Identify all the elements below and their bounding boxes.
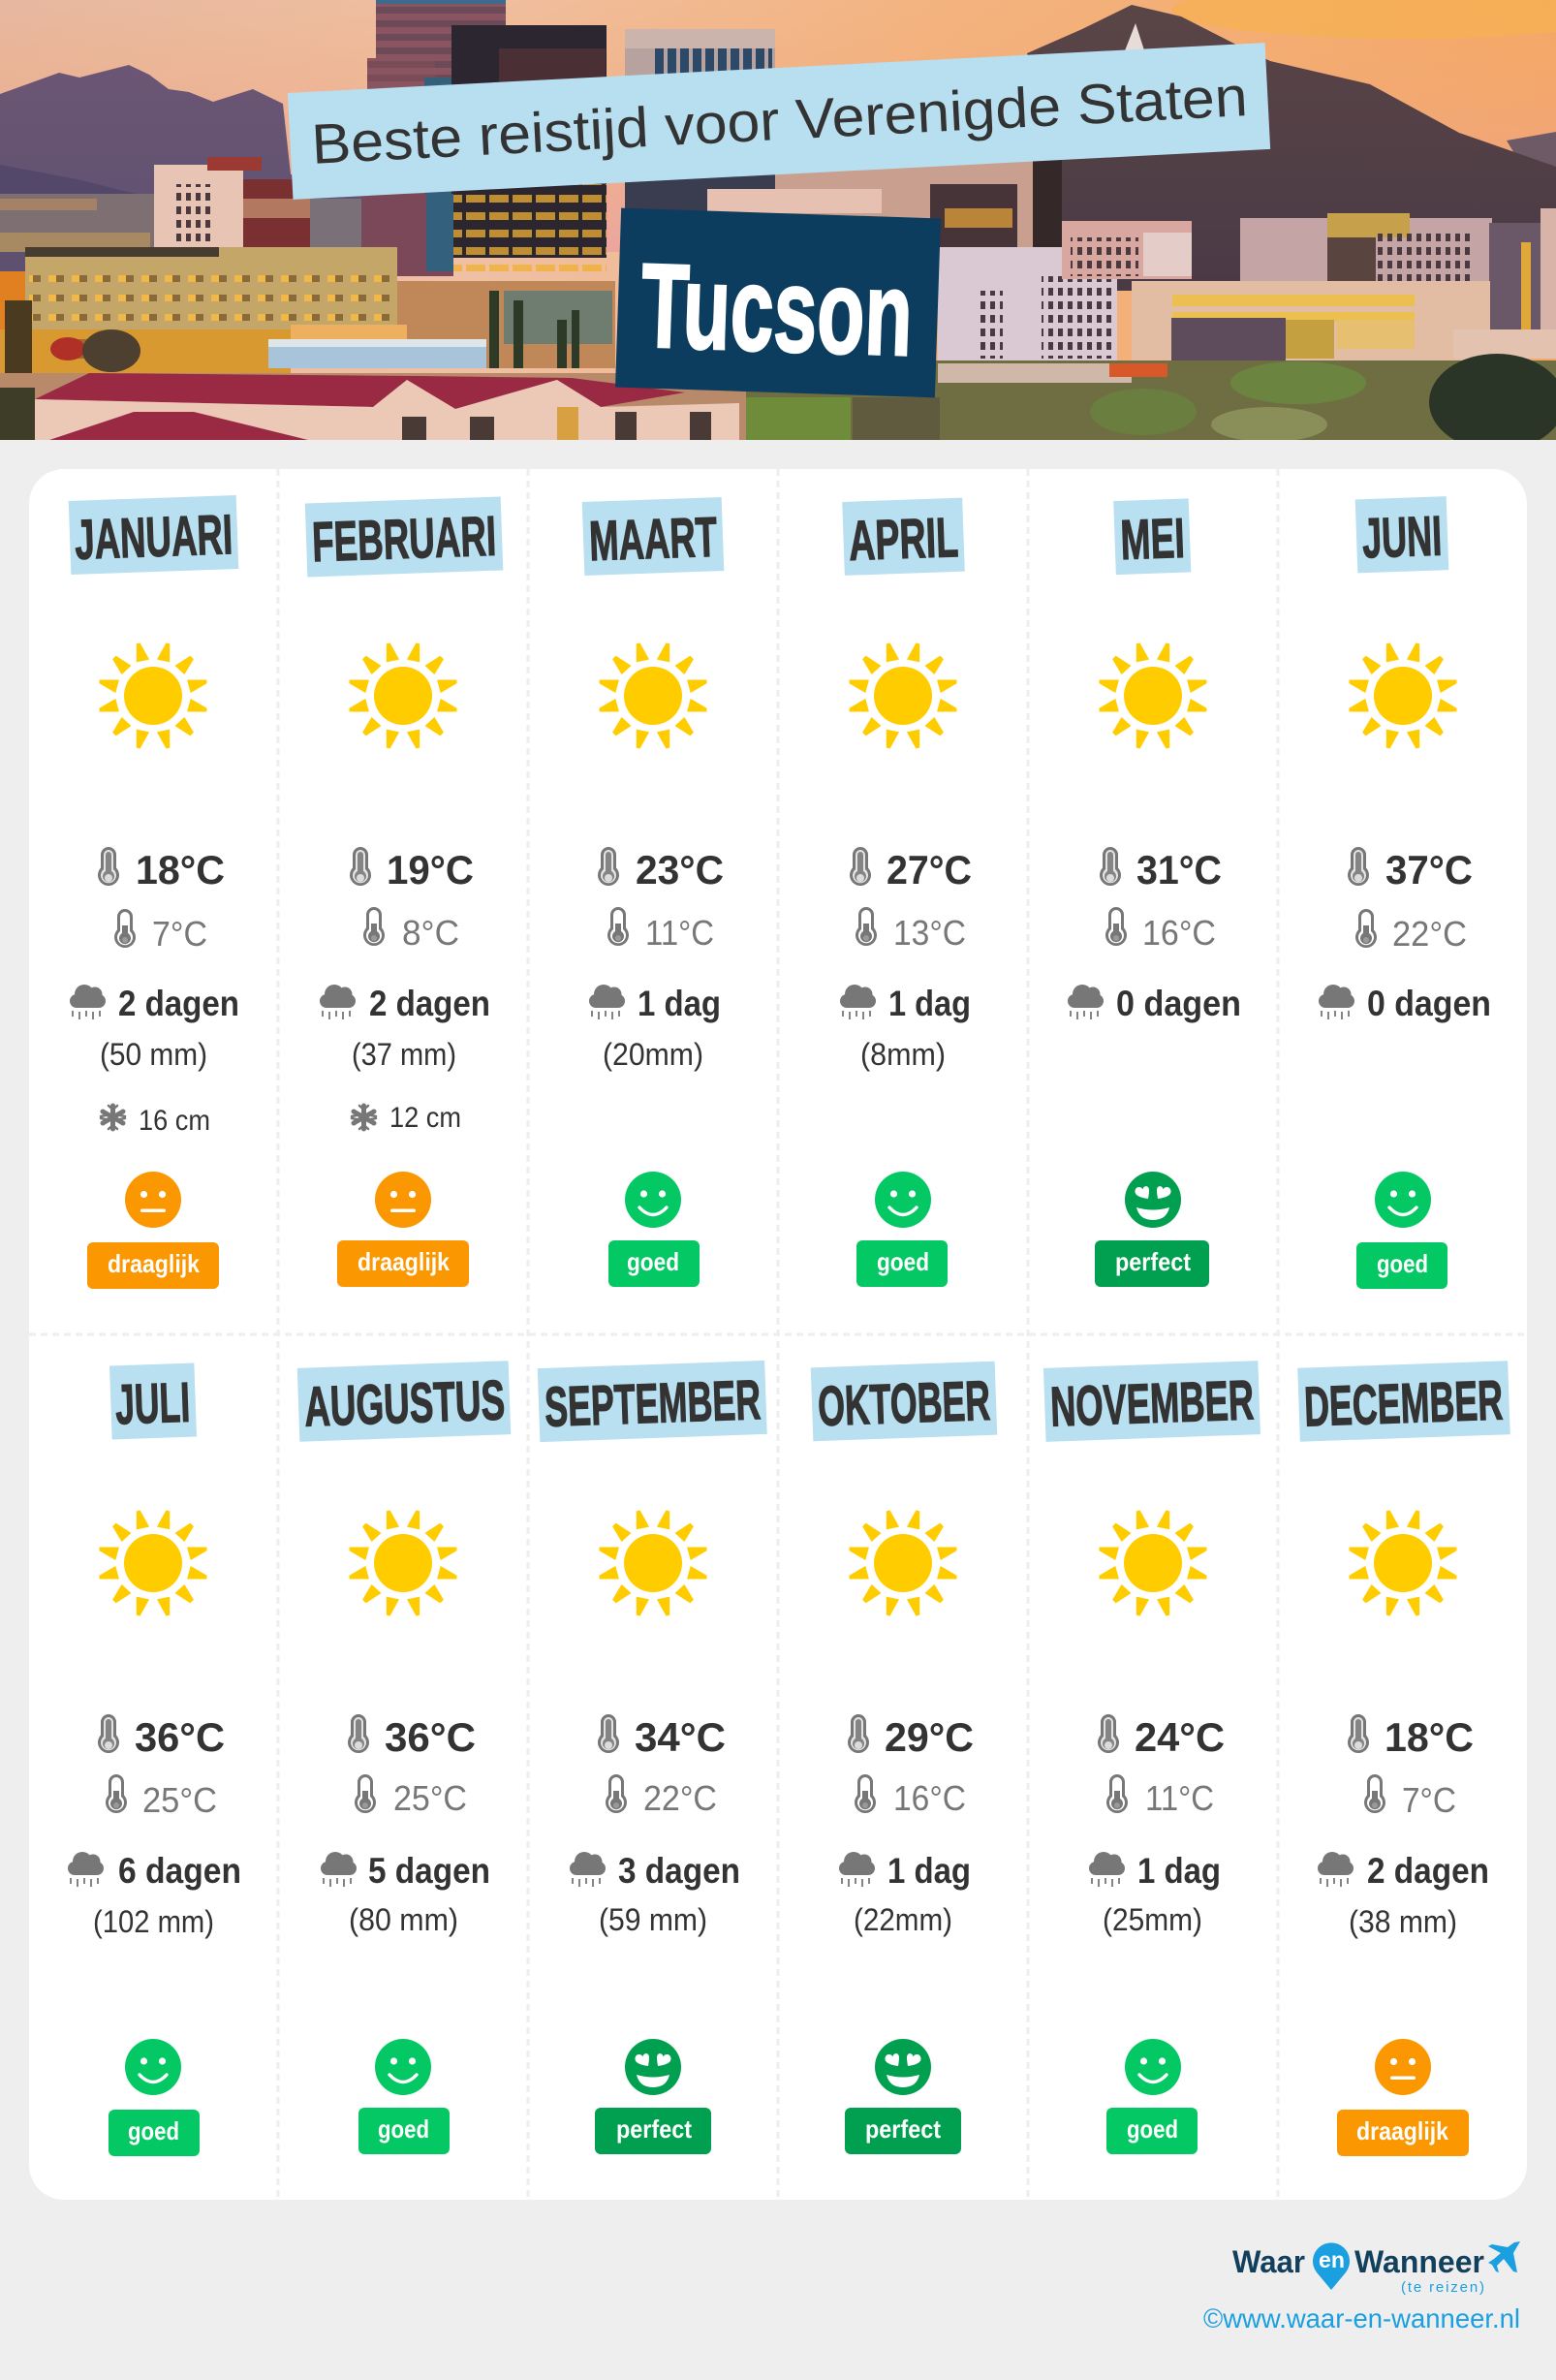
logo: Waar en Wanneer [1232, 2241, 1520, 2296]
month: april [840, 498, 972, 1287]
month heading [1355, 496, 1448, 573]
month heading [811, 1362, 997, 1441]
rating badge [595, 2108, 711, 2154]
icon: sun [100, 643, 206, 748]
icon: neutral face [375, 1172, 431, 1228]
month heading [69, 495, 238, 575]
icon: sun [1350, 643, 1456, 748]
month: februari [305, 496, 503, 1287]
max temperature: 27°C [887, 847, 972, 892]
min temperature: 16°C [893, 1778, 966, 1818]
icon: max temperature [1348, 1714, 1369, 1753]
icon: sun [850, 643, 956, 748]
rainfall: (59 mm) [599, 1902, 707, 1937]
icon: rain [839, 1852, 875, 1887]
rainfall: (8mm) [860, 1037, 946, 1072]
rating badge [337, 1240, 469, 1287]
max temperature: 34°C [635, 1714, 726, 1760]
rating badge: goed [877, 1247, 929, 1276]
icon: min temperature [106, 1774, 127, 1813]
icon: min temperature [114, 909, 136, 948]
rain days: 0 dagen [1116, 984, 1241, 1023]
min temperature: 11°C [1145, 1778, 1214, 1818]
icon: min temperature [1105, 907, 1127, 946]
month heading: FEBRUARI [311, 505, 497, 574]
icon: sun [100, 1511, 206, 1615]
month: juli [68, 1362, 241, 2156]
icon: rain [321, 1852, 357, 1887]
month: oktober [811, 1362, 997, 2154]
icon: max temperature [848, 1714, 869, 1753]
rating badge [608, 1240, 700, 1287]
month heading: JANUARI [74, 503, 233, 572]
icon: min temperature [855, 1774, 876, 1813]
rating badge [856, 1240, 948, 1287]
rain days: 1 dag [887, 1851, 971, 1891]
icon: max temperature [348, 1714, 369, 1753]
rating badge: goed [627, 1247, 679, 1276]
month heading: OKTOBER [817, 1369, 991, 1438]
icon: smiling face [1375, 1172, 1431, 1228]
month heading: AUGUSTUS [303, 1368, 506, 1439]
icon: min temperature [607, 907, 629, 946]
rainfall: (25mm) [1103, 1902, 1202, 1937]
rainfall: (102 mm) [93, 1904, 214, 1939]
icon: min temperature [856, 907, 877, 946]
min temperature: 25°C [393, 1778, 467, 1818]
icon: max temperature [98, 847, 119, 886]
icon: rain [1068, 985, 1104, 1019]
icon: sun [350, 1511, 456, 1615]
rain days: 1 dag [638, 984, 721, 1023]
month: mei [1068, 498, 1241, 1287]
logo word: Waar: Waar [1232, 2244, 1305, 2279]
rain days: 2 dagen [118, 984, 239, 1023]
rain days: 3 dagen [618, 1851, 740, 1891]
snowfall: 16 cm [139, 1105, 210, 1137]
rating badge: draaglijk [358, 1247, 450, 1276]
max temperature: 37°C [1385, 847, 1473, 892]
rating badge: goed [1377, 1249, 1428, 1278]
max temperature: 36°C [385, 1714, 476, 1760]
icon: smiling face [1125, 2039, 1181, 2095]
icon: sun [600, 1511, 706, 1615]
max temperature: 31°C [1136, 847, 1222, 892]
icon: rain [840, 985, 876, 1019]
month heading: JUNI [1361, 505, 1443, 570]
icon: max temperature [1348, 847, 1369, 886]
rain days: 2 dagen [1367, 1851, 1489, 1891]
panel: monthly climate table [29, 469, 1527, 2200]
month heading: MAART [588, 506, 718, 573]
rain days: 0 dagen [1367, 984, 1491, 1023]
logo tagline: (te reizen) [1401, 2279, 1484, 2296]
icon: sun [1100, 1511, 1206, 1615]
rain days: 6 dagen [118, 1851, 241, 1891]
icon: max temperature [98, 1714, 119, 1753]
icon: sun [1100, 643, 1206, 748]
rating badge: perfect [1115, 1247, 1191, 1276]
month heading: MEI [1119, 507, 1186, 572]
icon: max temperature [350, 847, 371, 886]
rating badge [1337, 2110, 1469, 2156]
icon: max temperature [1098, 1714, 1119, 1753]
rating badge: perfect [616, 2114, 692, 2144]
month: maart [582, 497, 724, 1287]
rating badge [1095, 1240, 1209, 1287]
icon: sun [600, 643, 706, 748]
rating badge: perfect [865, 2114, 941, 2144]
rating badge [1106, 2108, 1198, 2154]
max temperature: 29°C [885, 1714, 974, 1760]
city name banner: Tucson: Tucson [639, 239, 915, 382]
icon: airplane [1488, 2241, 1520, 2272]
icon: snow [352, 1106, 376, 1129]
icon: min temperature [1106, 1774, 1128, 1813]
icon: max temperature [850, 847, 871, 886]
icon: rain [1318, 1852, 1354, 1887]
icon: smiling face [625, 1172, 681, 1228]
rainfall: (20mm) [603, 1037, 703, 1072]
month heading [842, 498, 965, 576]
icon: max temperature [598, 847, 619, 886]
month: september [538, 1361, 767, 2154]
month heading [1113, 498, 1191, 575]
month heading [297, 1361, 511, 1442]
rating badge [1356, 1242, 1447, 1289]
rainfall: (38 mm) [1349, 1904, 1457, 1939]
icon: sun [1350, 1511, 1456, 1615]
icon: min temperature [1364, 1774, 1385, 1813]
min temperature: 7°C [1402, 1780, 1456, 1820]
snowfall: 12 cm [389, 1102, 461, 1134]
month: januari [69, 495, 239, 1289]
rating badge [109, 2110, 200, 2156]
max temperature: 19°C [387, 847, 474, 892]
icon: sun [350, 643, 456, 748]
icon: rain [70, 985, 106, 1019]
max temperature: 36°C [135, 1714, 225, 1760]
icon: rain [1319, 985, 1354, 1019]
rain days: 2 dagen [369, 984, 490, 1023]
rating badge: goed [1127, 2114, 1178, 2144]
min temperature: 13°C [893, 913, 966, 953]
rain days: 5 dagen [368, 1851, 490, 1891]
website credit: ©www.waar-en-wanneer.nl [1203, 2303, 1520, 2333]
icon: min temperature [606, 1774, 627, 1813]
rain days: 1 dag [1137, 1851, 1221, 1891]
icon: max temperature [598, 1714, 619, 1753]
title banner: Beste reistijd voor Verenigde Staten [310, 65, 1249, 176]
icon: neutral face [1375, 2039, 1431, 2095]
icon: snow [101, 1106, 125, 1129]
month heading: JULI [114, 1371, 191, 1436]
icon: rain [320, 985, 356, 1019]
rainfall: (80 mm) [349, 1902, 458, 1937]
rating badge [358, 2108, 450, 2154]
month: juni [1319, 496, 1491, 1289]
icon: min temperature [363, 907, 385, 946]
month heading [109, 1362, 197, 1440]
icon: rain [68, 1852, 104, 1887]
rain days: 1 dag [888, 984, 971, 1023]
icon: rain [570, 1852, 606, 1887]
icon: min temperature [355, 1774, 376, 1813]
min temperature: 22°C [1392, 914, 1467, 954]
icon: heart-eyes face [1125, 1172, 1181, 1228]
icon: smiling face [125, 2039, 181, 2095]
max temperature: 18°C [1385, 1714, 1474, 1760]
icon: smiling face [375, 2039, 431, 2095]
icon: max temperature [1100, 847, 1121, 886]
icon: min temperature [1355, 909, 1377, 948]
header photo: Tucson skyline at dusk [0, 0, 1556, 451]
month: augustus [297, 1361, 511, 2154]
rating badge: goed [128, 2116, 179, 2145]
min temperature: 22°C [643, 1778, 717, 1818]
rating badge [845, 2108, 961, 2154]
month heading [305, 496, 503, 577]
icon: heart-eyes face [875, 2039, 931, 2095]
icon: smiling face [875, 1172, 931, 1228]
icon: map pin with en: en [1319, 2247, 1345, 2272]
month heading: NOVEMBER [1049, 1368, 1255, 1439]
icon: rain [589, 985, 625, 1019]
rainfall: (50 mm) [100, 1037, 207, 1072]
icon: sun [850, 1511, 956, 1615]
min temperature: 11°C [645, 913, 714, 953]
icon: heart-eyes face [625, 2039, 681, 2095]
month: november [1043, 1361, 1260, 2154]
max temperature: 23°C [636, 847, 724, 892]
max temperature: 18°C [136, 847, 225, 892]
month heading: APRIL [848, 506, 959, 573]
min temperature: 8°C [402, 913, 459, 953]
month heading: SEPTEMBER [544, 1368, 762, 1439]
max temperature: 24°C [1135, 1714, 1225, 1760]
rating badge [87, 1242, 219, 1289]
rating badge: goed [378, 2114, 429, 2144]
month heading [1043, 1361, 1260, 1442]
rating badge: draaglijk [108, 1249, 200, 1278]
min temperature: 7°C [152, 914, 207, 954]
min temperature: 25°C [142, 1780, 217, 1820]
min temperature: 16°C [1142, 913, 1216, 953]
rainfall: (37 mm) [352, 1037, 456, 1072]
icon: neutral face [125, 1172, 181, 1228]
icon: rain [1089, 1852, 1125, 1887]
rainfall: (22mm) [854, 1902, 952, 1937]
rating badge: draaglijk [1356, 2116, 1448, 2145]
month heading [538, 1361, 767, 1442]
icon: map pin with en [1313, 2242, 1350, 2290]
logo word: Wanneer: Wanneer [1354, 2244, 1484, 2279]
month heading [582, 497, 724, 576]
title banner [288, 43, 1270, 200]
city name banner: Tucson [615, 208, 941, 397]
month: december [1297, 1361, 1510, 2156]
